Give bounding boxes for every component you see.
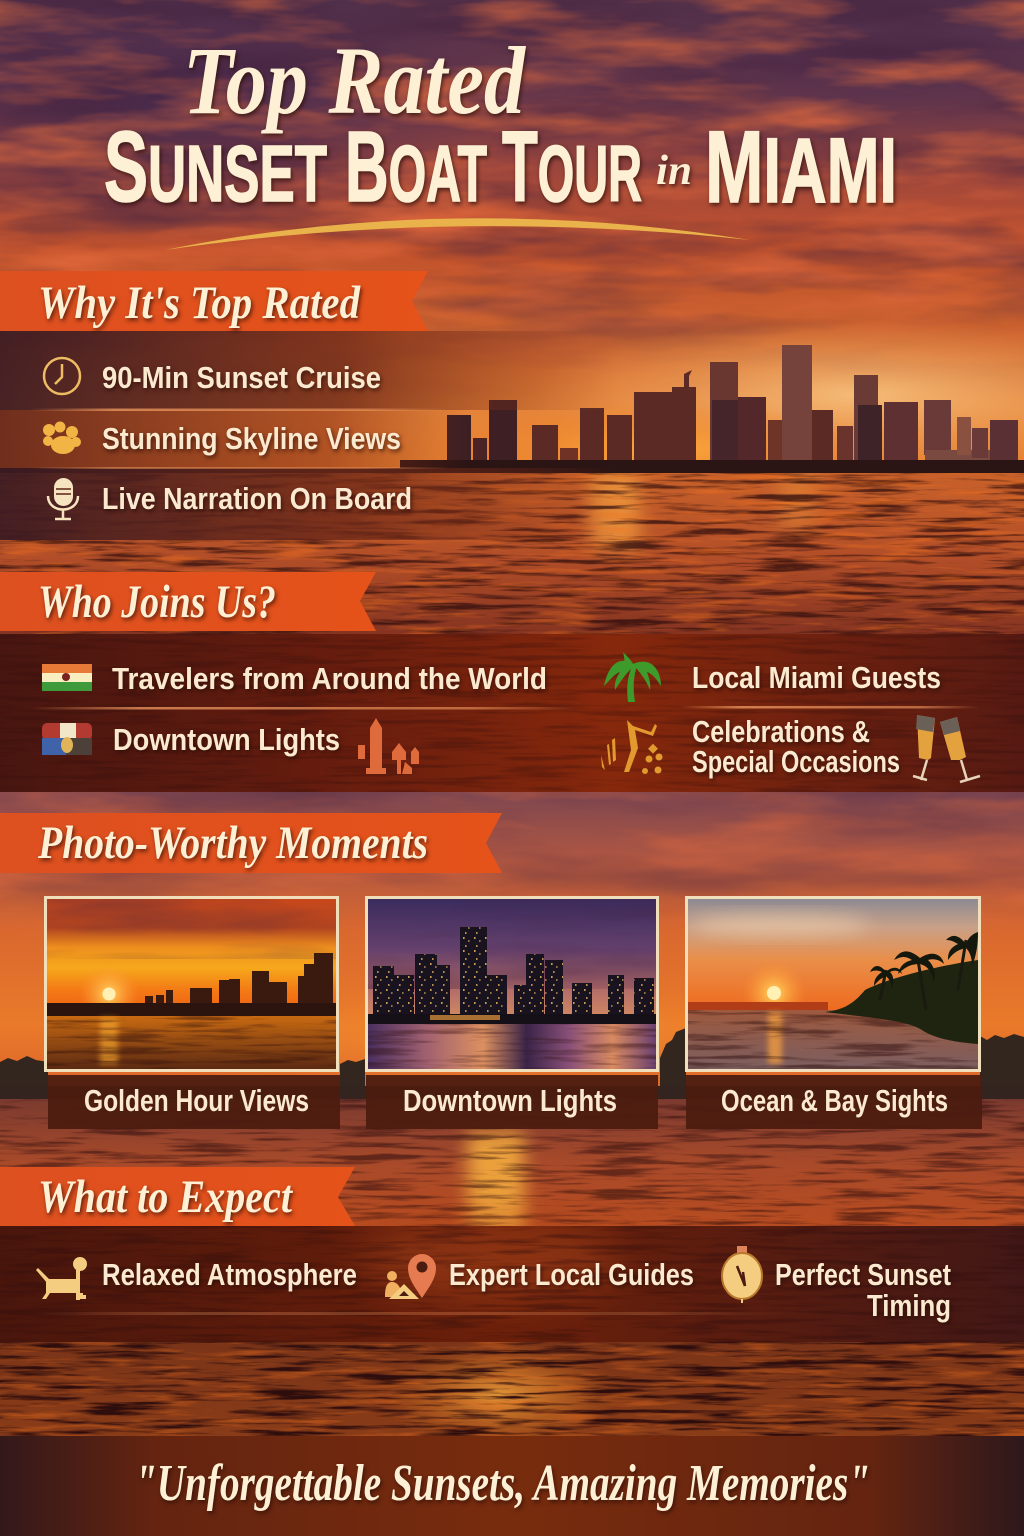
treeline bbox=[0, 1028, 1024, 1102]
item: 90-min cruise: 90-Min Sunset Cruise bbox=[102, 360, 381, 395]
icon: clock bbox=[44, 358, 80, 394]
skyline silhouette bbox=[0, 345, 1024, 473]
title script line: Top Rated bbox=[183, 27, 527, 134]
title main line: TOUR bbox=[502, 111, 642, 223]
downtown photo bbox=[368, 899, 656, 1069]
ribbon heading bbox=[0, 572, 376, 631]
ribbon heading: Who Joins Us? bbox=[38, 576, 276, 628]
item: celebrations: Special Occasions bbox=[692, 744, 900, 779]
panel background bbox=[0, 634, 1024, 792]
panel background bbox=[0, 1220, 1024, 1342]
title bbox=[104, 27, 897, 224]
photo card: downtown lights bbox=[365, 896, 659, 1129]
icon: paw bbox=[43, 422, 81, 454]
photo frame bbox=[685, 896, 981, 1072]
golden hour photo bbox=[47, 899, 336, 1069]
title main line bbox=[104, 110, 897, 224]
title main line: SUNSET bbox=[104, 111, 327, 223]
icon: palm tree bbox=[604, 652, 661, 702]
item: travelers: Travelers from Around the World bbox=[112, 661, 547, 696]
item: celebrations: Celebrations & bbox=[692, 714, 870, 749]
caption bar bbox=[48, 1075, 340, 1129]
ribbon heading: What to Expect bbox=[38, 1171, 294, 1223]
photo frame bbox=[365, 896, 659, 1072]
title gold arc bbox=[165, 218, 750, 250]
item: local guides: Expert Local Guides bbox=[449, 1257, 694, 1292]
lower sky bbox=[0, 792, 1024, 1102]
icon: lounge chair bbox=[36, 1257, 87, 1300]
title main line: MIAMI bbox=[705, 110, 897, 224]
icon: city towers bbox=[358, 718, 419, 774]
item: perfect timing: Perfect Sunset bbox=[775, 1257, 951, 1292]
photo card: golden hour bbox=[44, 896, 340, 1129]
caption: Golden Hour Views bbox=[84, 1083, 309, 1118]
icon: stopwatch bbox=[722, 1246, 762, 1303]
panel background bbox=[0, 331, 620, 540]
item: live narration: Live Narration On Board bbox=[102, 481, 412, 516]
icon: harp and confetti bbox=[601, 720, 662, 774]
item: local guests: Local Miami Guests bbox=[692, 660, 941, 695]
item: downtown lights: Downtown Lights bbox=[113, 722, 340, 757]
item: relaxed atmosphere: Relaxed Atmosphere bbox=[102, 1257, 357, 1292]
panel: closing quote bbox=[0, 1436, 1024, 1536]
caption bar bbox=[366, 1075, 658, 1129]
ocean photo bbox=[688, 899, 978, 1069]
item: celebrations bbox=[692, 714, 900, 779]
icon: flag bbox=[42, 664, 92, 691]
item: perfect timing: Timing bbox=[867, 1288, 951, 1323]
caption: Downtown Lights bbox=[403, 1083, 617, 1118]
upper water bbox=[0, 470, 1024, 645]
ribbon heading: Why It's Top Rated bbox=[38, 277, 361, 329]
panel: what to expect bbox=[0, 1167, 1024, 1342]
lower water bbox=[0, 1098, 1024, 1450]
title main line: in bbox=[656, 148, 692, 194]
icon: location pin and guide bbox=[385, 1254, 436, 1299]
icon: champagne glasses bbox=[913, 715, 980, 782]
ribbon heading: Photo-Worthy Moments bbox=[37, 817, 428, 869]
caption: Ocean & Bay Sights bbox=[721, 1083, 948, 1118]
item: perfect timing bbox=[775, 1257, 951, 1323]
icon: passport emblem bbox=[42, 723, 92, 755]
caption bar bbox=[686, 1075, 982, 1129]
panel: why it's top rated bbox=[0, 271, 620, 540]
icon: microphone bbox=[48, 478, 78, 519]
item: skyline views: Stunning Skyline Views bbox=[102, 421, 401, 456]
panel: who joins us bbox=[0, 572, 1024, 792]
title main line: BOAT bbox=[345, 111, 487, 223]
panel: photo-worthy moments bbox=[0, 813, 982, 1129]
photo frame bbox=[44, 896, 339, 1072]
quote band bbox=[0, 1436, 1024, 1536]
photo card: ocean and bay bbox=[685, 896, 982, 1129]
upper sky bbox=[0, 0, 1024, 498]
